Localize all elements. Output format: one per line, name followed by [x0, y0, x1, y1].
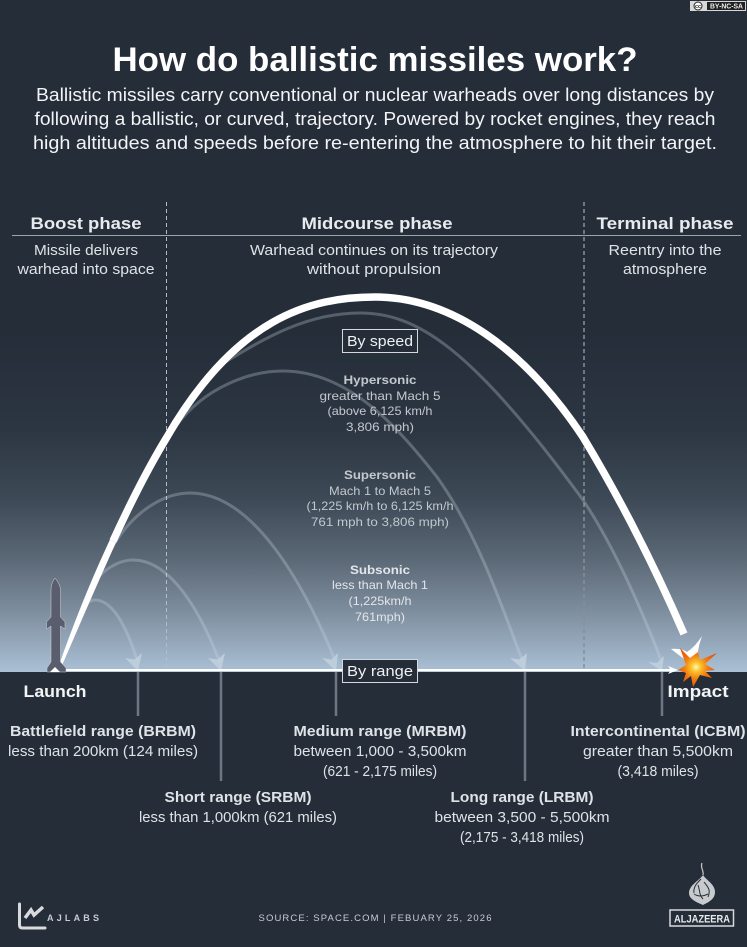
- range: medium: [294, 724, 467, 780]
- license badge: BY-NC-SA: [710, 4, 743, 10]
- arrowheads: [125, 653, 664, 671]
- label: by speed: By speed: [347, 333, 413, 350]
- icon: explosion: [678, 648, 717, 687]
- phase: terminal: [596, 214, 734, 278]
- intro text: Ballistic missiles carry conventional or nuclear warheads over long distances by: [36, 84, 715, 105]
- range: battlefield: less than 200km (124 miles): [8, 744, 198, 760]
- range trajectories: [81, 313, 661, 663]
- phase: midcourse: [250, 214, 499, 278]
- range: medium: Medium range (MRBM): [294, 724, 467, 740]
- label: launch: Launch: [24, 683, 86, 701]
- logo: AJ Labs: AJLABS: [47, 913, 99, 923]
- range: battlefield: Battlefield range (BRBM): [10, 724, 196, 740]
- phase: terminal: atmosphere: [623, 262, 707, 278]
- speed: subsonic: [332, 563, 428, 624]
- speed: subsonic: less than Mach 1: [332, 578, 428, 592]
- ground line and arrow: [62, 666, 678, 674]
- phase: midcourse: without propulsion: [306, 262, 441, 278]
- speed: supersonic: [306, 468, 454, 529]
- range: intercontinental: [570, 724, 746, 780]
- logo: AJ Labs: [20, 904, 99, 928]
- phase: boost: Missile delivers: [34, 243, 138, 259]
- license badge: cc: [695, 4, 701, 10]
- range: long: Long range (LRBM): [450, 790, 594, 806]
- phase: boost: warhead into space: [16, 262, 154, 278]
- speed: supersonic: Mach 1 to Mach 5: [329, 484, 431, 498]
- range: intercontinental: Intercontinental (ICBM): [570, 724, 746, 740]
- speed: supersonic: (1,225 km/h to 6,125 km/h: [306, 499, 454, 513]
- phase: midcourse: Midcourse phase: [302, 214, 452, 233]
- main arrowhead: [671, 636, 702, 669]
- speed: hypersonic: [320, 373, 441, 434]
- range drop lines: [138, 672, 662, 781]
- range: medium: (621 - 2,175 miles): [323, 764, 437, 780]
- range: short: Short range (SRBM): [164, 790, 312, 806]
- speed: subsonic: Subsonic: [350, 563, 410, 577]
- title: How do ballistic missiles work?: [112, 41, 638, 79]
- speed: hypersonic: 3,806 mph): [346, 420, 414, 434]
- range: short: less than 1,000km (621 miles): [139, 810, 337, 826]
- label: by speed: [342, 330, 418, 352]
- phase: terminal: Reentry into the: [608, 243, 722, 259]
- speed: supersonic: 761 mph to 3,806 mph): [311, 515, 449, 529]
- source line: SOURCE: SPACE.COM | FEBUARY 25, 2026: [258, 913, 492, 924]
- speed: subsonic: (1,225km/h: [348, 594, 412, 608]
- intro text: following a ballistic, or curved, trajectory. Powered by rocket engines, they reach: [34, 108, 716, 129]
- phase: midcourse: Warhead continues on its trajectory: [250, 243, 499, 259]
- sky gradient: [0, 330, 747, 672]
- speed: subsonic: 761mph): [355, 610, 405, 624]
- main trajectory: [58, 297, 684, 670]
- phase: terminal: Terminal phase: [596, 214, 734, 233]
- range: long: (2,175 - 3,418 miles): [460, 830, 584, 846]
- label: by range: By range: [347, 663, 413, 680]
- icon: missile: [46, 578, 66, 672]
- phase divider lines: [12, 202, 741, 668]
- speed: hypersonic: greater than Mach 5: [320, 389, 441, 403]
- logo: Al Jazeera: ALJAZEERA: [674, 914, 730, 926]
- license badge: [690, 1, 746, 11]
- range: intercontinental: greater than 5,500km: [583, 744, 733, 760]
- intro text: [33, 84, 717, 153]
- label: impact: Impact: [668, 683, 729, 701]
- speed: supersonic: Supersonic: [344, 468, 416, 482]
- range: long: [434, 790, 610, 846]
- range: intercontinental: (3,418 miles): [618, 764, 698, 780]
- label: by range: [342, 660, 418, 682]
- range: long: between 3,500 - 5,500km: [434, 810, 610, 826]
- range: medium: between 1,000 - 3,500km: [294, 744, 466, 760]
- speed: hypersonic: Hypersonic: [344, 373, 417, 387]
- speed: hypersonic: (above 6,125 km/h: [328, 404, 432, 418]
- logo: Al Jazeera: [670, 863, 734, 926]
- phase: boost: Boost phase: [30, 214, 142, 233]
- phase: boost: [16, 214, 154, 278]
- range: short: [139, 790, 337, 826]
- range: battlefield: [8, 724, 198, 760]
- intro text: high altitudes and speeds before re-entering the atmosphere to hit their target.: [33, 132, 717, 153]
